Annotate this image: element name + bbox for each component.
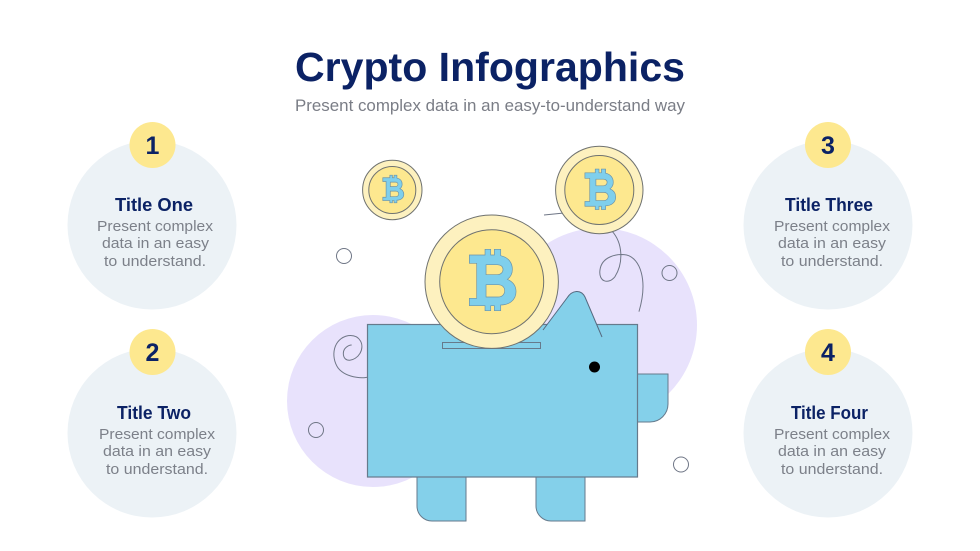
pig ear xyxy=(543,291,602,337)
text block: card three body: Present complex xyxy=(774,218,891,235)
text block: card one body: to understand. xyxy=(104,253,206,270)
icon: number badge 1 xyxy=(130,122,176,168)
text block: card three body: data in an easy xyxy=(778,235,887,252)
text block: card one body: data in an easy xyxy=(102,235,210,252)
illustration: piggy bank with coins xyxy=(287,146,697,521)
text block: card two body xyxy=(99,426,216,478)
coin slot xyxy=(442,342,540,348)
text block: card two body: Present complex xyxy=(99,426,216,443)
icon: top right bitcoin coin xyxy=(556,146,643,234)
background blob: right purple circle xyxy=(503,228,697,422)
decorative rings xyxy=(308,248,688,472)
text block: card two body: to understand. xyxy=(106,461,208,478)
panel: card two xyxy=(68,329,236,518)
panel: card three xyxy=(744,122,912,310)
text block: card four body: Present complex xyxy=(774,426,891,443)
heading: title two: Title Two xyxy=(117,403,191,423)
squiggle: short line by top coin xyxy=(544,213,564,215)
text block: card three body xyxy=(774,218,891,270)
icon: number badge 4 xyxy=(805,329,851,375)
squiggle: coin motion line right xyxy=(600,231,643,312)
heading: title four: Title Four xyxy=(791,403,868,423)
pig snout xyxy=(637,374,668,422)
text block: card four body xyxy=(774,426,891,478)
icon: number badge 4: 4 xyxy=(821,339,835,367)
icon: number badge 3 xyxy=(805,122,851,168)
heading: title three: Title Three xyxy=(785,195,873,215)
icon: number badge 3: 3 xyxy=(821,132,835,160)
title: Crypto Infographics xyxy=(295,44,685,90)
text block: card three body: to understand. xyxy=(781,253,883,270)
text block: card one body: Present complex xyxy=(97,218,214,235)
icon: number badge 1: 1 xyxy=(146,132,160,160)
panel: card four xyxy=(744,329,912,518)
text block: card four body: data in an easy xyxy=(778,443,887,460)
pig eye xyxy=(589,362,600,372)
icon: number badge 2: 2 xyxy=(146,339,159,367)
subtitle: Present complex data in an easy-to-understand way xyxy=(295,96,685,115)
text block: card one body xyxy=(97,218,214,270)
text block: card four body: to understand. xyxy=(781,461,883,478)
panel: card one xyxy=(68,122,236,310)
pig leg rear xyxy=(417,477,466,521)
squiggle: pig tail xyxy=(334,336,373,378)
heading: title one: Title One xyxy=(115,195,193,215)
background blob: left purple circle xyxy=(287,315,459,487)
text block: card two body: data in an easy xyxy=(103,443,212,460)
pig leg front xyxy=(536,477,585,521)
icon: big bitcoin coin xyxy=(425,215,558,348)
pig body xyxy=(368,324,638,477)
icon: number badge 2 xyxy=(130,329,176,375)
icon: small bitcoin coin xyxy=(363,160,422,220)
